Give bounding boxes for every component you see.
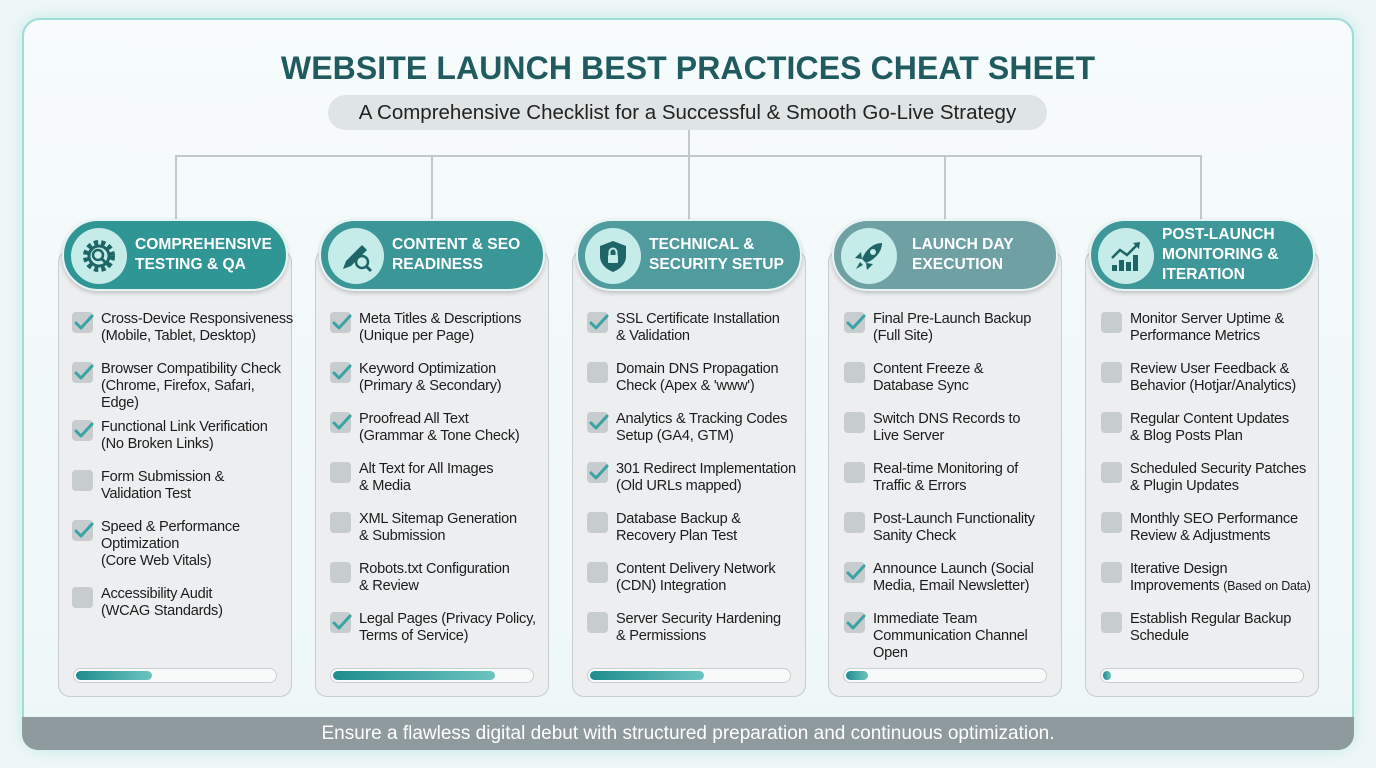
text: Communication Channel [873, 628, 1028, 644]
text: Domain DNS Propagation [616, 361, 778, 377]
header: launch: EXECUTION [912, 256, 1003, 273]
text: Accessibility Audit [101, 586, 212, 602]
subtitle: A Comprehensive Checklist for a Successful & Smooth Go-Live Strategy [359, 101, 1016, 124]
text: Cross-Device Responsiveness [101, 311, 293, 327]
text: (Full Site) [873, 328, 933, 344]
text: Improvements (Based on Data) [1130, 578, 1311, 594]
text: Traffic & Errors [873, 478, 966, 494]
text: Sanity Check [873, 528, 956, 544]
text: Terms of Service) [359, 628, 468, 644]
text: & Submission [359, 528, 445, 544]
text: Post-Launch Functionality [873, 511, 1035, 527]
panel: technical [572, 250, 806, 697]
text: Robots.txt Configuration [359, 561, 510, 577]
text: (Primary & Secondary) [359, 378, 501, 394]
text: Media, Email Newsletter) [873, 578, 1029, 594]
header: post-launch: MONITORING & [1162, 246, 1279, 263]
text: Edge) [101, 395, 139, 411]
text: Database Sync [873, 378, 969, 394]
text: XML Sitemap Generation [359, 511, 517, 527]
text: & Validation [616, 328, 690, 344]
header: content: READINESS [392, 256, 483, 273]
text: Browser Compatibility Check [101, 361, 281, 377]
header: technical: SECURITY SETUP [649, 256, 784, 273]
text: Speed & Performance [101, 519, 240, 535]
items: testing [72, 311, 293, 619]
text: Content Freeze & [873, 361, 983, 377]
text: Live Server [873, 428, 944, 444]
text: Performance Metrics [1130, 328, 1260, 344]
text: Schedule [1130, 628, 1189, 644]
progress: launch [843, 668, 1047, 683]
text: Check (Apex & 'www') [616, 378, 754, 394]
text: (Core Web Vitals) [101, 553, 211, 569]
header: launch: LAUNCH DAY [912, 236, 1014, 253]
text: Functional Link Verification [101, 419, 268, 435]
header: testing: TESTING & QA [135, 256, 246, 273]
text: Open [873, 645, 908, 661]
text: Setup (GA4, GTM) [616, 428, 734, 444]
header: testing: COMPREHENSIVE [135, 236, 272, 253]
text: Switch DNS Records to [873, 411, 1020, 427]
text: Optimization [101, 536, 179, 552]
progress: content [330, 668, 534, 683]
subtitle [328, 95, 1047, 130]
text: Content Delivery Network [616, 561, 775, 577]
header: post-launch: ITERATION [1162, 266, 1245, 283]
text: (CDN) Integration [616, 578, 726, 594]
header: testing [62, 219, 288, 291]
text: Database Backup & [616, 511, 741, 527]
footer [22, 717, 1354, 750]
progress: testing [73, 668, 277, 683]
text: Proofread All Text [359, 411, 469, 427]
panel: content [315, 250, 549, 697]
text: (Mobile, Tablet, Desktop) [101, 328, 256, 344]
text: (Unique per Page) [359, 328, 474, 344]
header: launch [832, 219, 1058, 291]
text: Alt Text for All Images [359, 461, 493, 477]
header: content: CONTENT & SEO [392, 236, 520, 253]
text: (Old URLs mapped) [616, 478, 742, 494]
progress: technical [587, 668, 791, 683]
text: & Permissions [616, 628, 706, 644]
text: Establish Regular Backup [1130, 611, 1291, 627]
header: post-launch [1089, 219, 1315, 291]
text: & Media [359, 478, 411, 494]
text: Validation Test [101, 486, 191, 502]
footer: Ensure a flawless digital debut with structured preparation and continuous optimization. [322, 723, 1054, 744]
header: technical: TECHNICAL & [649, 236, 754, 253]
text: SSL Certificate Installation [616, 311, 780, 327]
items: technical [587, 311, 796, 644]
text: (No Broken Links) [101, 436, 214, 452]
text: & Blog Posts Plan [1130, 428, 1243, 444]
progress: post-launch [1100, 668, 1304, 683]
text: 301 Redirect Implementation [616, 461, 796, 477]
text: & Plugin Updates [1130, 478, 1239, 494]
text: Legal Pages (Privacy Policy, [359, 611, 536, 627]
text: Announce Launch (Social [873, 561, 1034, 577]
panel: post-launch [1085, 250, 1319, 697]
text: Iterative Design [1130, 561, 1227, 577]
text: Recovery Plan Test [616, 528, 737, 544]
text: Immediate Team [873, 611, 977, 627]
header: content [319, 219, 545, 291]
text: Analytics & Tracking Codes [616, 411, 787, 427]
text: Scheduled Security Patches [1130, 461, 1306, 477]
header: post-launch: POST-LAUNCH [1162, 226, 1275, 243]
text: (WCAG Standards) [101, 603, 223, 619]
text: & Review [359, 578, 419, 594]
title: WEBSITE LAUNCH BEST PRACTICES CHEAT SHEET [281, 50, 1095, 86]
text: (Chrome, Firefox, Safari, [101, 378, 255, 394]
text: Final Pre-Launch Backup [873, 311, 1031, 327]
text: Keyword Optimization [359, 361, 496, 377]
text: Regular Content Updates [1130, 411, 1289, 427]
text: Monthly SEO Performance [1130, 511, 1298, 527]
items: launch [844, 311, 1035, 661]
text: Meta Titles & Descriptions [359, 311, 521, 327]
text: Form Submission & [101, 469, 224, 485]
panel: testing [58, 250, 292, 697]
items: content [330, 311, 536, 644]
text: Real-time Monitoring of [873, 461, 1018, 477]
text: Behavior (Hotjar/Analytics) [1130, 378, 1296, 394]
text: (Grammar & Tone Check) [359, 428, 519, 444]
connector tree [175, 130, 1202, 219]
header: technical [576, 219, 802, 291]
text: Review User Feedback & [1130, 361, 1289, 377]
panel: launch [828, 250, 1062, 697]
text: Server Security Hardening [616, 611, 781, 627]
text: Review & Adjustments [1130, 528, 1270, 544]
text: Monitor Server Uptime & [1130, 311, 1284, 327]
items: post-launch [1101, 311, 1311, 644]
